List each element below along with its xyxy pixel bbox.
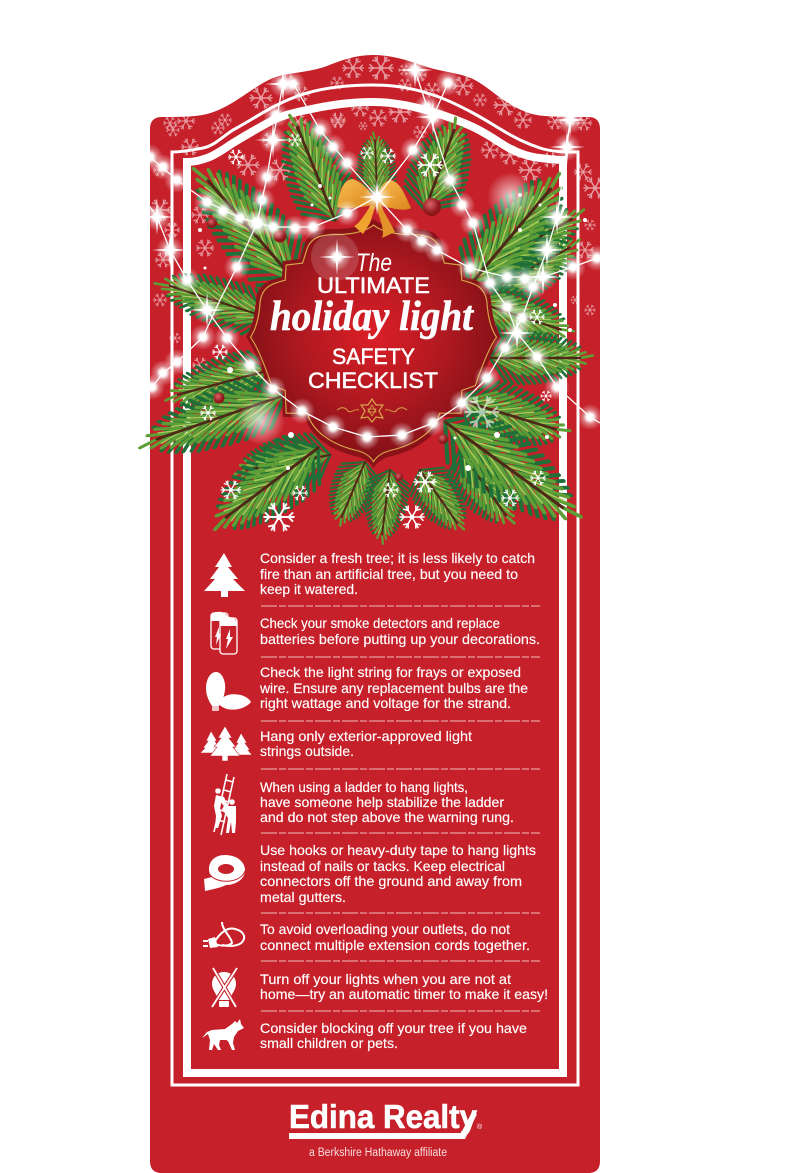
item: turn off lights: home—try an automatic timer to make it easy! xyxy=(260,986,548,1002)
light bulbs xyxy=(137,52,610,450)
item: outlets: To avoid overloading your outlets, do not xyxy=(260,921,510,937)
icon: three pine trees xyxy=(200,726,252,761)
item: ladder: have someone help stabilize the ladder xyxy=(260,794,504,810)
item: hooks and tape: connectors off the ground and away from xyxy=(260,873,522,889)
item: exterior light strings: Hang only exterior-approved light xyxy=(260,728,472,744)
item: block off tree xyxy=(202,1019,527,1051)
icon: extension cord plug xyxy=(203,922,244,948)
checklist dividers xyxy=(261,606,540,1011)
item: fresh tree: Consider a fresh tree; it is less likely to catch xyxy=(260,550,535,566)
item: light string xyxy=(206,664,528,711)
item: smoke detectors: batteries before putting up your decorations. xyxy=(260,631,540,647)
item: hooks and tape: metal gutters. xyxy=(260,889,346,905)
item: smoke detectors xyxy=(211,612,540,654)
item: block off tree: small children or pets. xyxy=(260,1035,398,1051)
item: ladder: and do not step above the warning rung. xyxy=(260,809,514,825)
item: light string: right wattage and voltage for the strand. xyxy=(260,695,511,711)
icon: pine tree xyxy=(204,553,245,597)
icon: dog xyxy=(202,1019,244,1050)
item: exterior light strings xyxy=(200,726,472,761)
title text: ULTIMATE xyxy=(317,273,430,298)
berries xyxy=(207,198,448,481)
item: block off tree: Consider blocking off your tree if you have xyxy=(260,1020,527,1036)
flakes over wreath xyxy=(200,134,552,530)
icon: tape roll xyxy=(204,855,245,891)
title text xyxy=(270,249,474,393)
card background xyxy=(150,55,600,1173)
logo: Edina Realty xyxy=(289,1098,483,1159)
item: fresh tree: fire than an artificial tree, but you need to xyxy=(260,566,518,582)
item: hooks and tape: instead of nails or tacks. Keep electrical xyxy=(260,858,505,874)
pine wreath xyxy=(130,103,599,553)
snowflake pattern xyxy=(149,57,606,372)
title badge xyxy=(246,219,501,468)
item: outlets xyxy=(203,921,530,953)
frame: outer thin line xyxy=(172,85,578,1085)
title text: holiday light xyxy=(270,294,474,340)
item: fresh tree xyxy=(204,550,535,597)
title text: CHECKLIST xyxy=(308,368,438,393)
icon: crossed out bulb xyxy=(212,968,237,1007)
snow specks xyxy=(198,184,587,471)
bow xyxy=(337,179,411,238)
item: light string: Check the light string for frays or exposed xyxy=(260,664,521,680)
item: light string: wire. Ensure any replacement bulbs are the xyxy=(259,680,528,696)
item: hooks and tape xyxy=(204,842,536,905)
frame: inner thick line xyxy=(187,102,563,1073)
logo: Edina Realty: a Berkshire Hathaway affiliate xyxy=(309,1147,447,1159)
item: turn off lights: Turn off your lights when you are not at xyxy=(260,971,511,987)
icon: batteries xyxy=(211,612,237,654)
item: fresh tree: keep it watered. xyxy=(260,581,358,597)
light strings xyxy=(150,70,600,437)
item: ladder: When using a ladder to hang lights, xyxy=(260,779,468,795)
star ornament xyxy=(337,399,407,422)
logo: Edina Realty: ® xyxy=(477,1123,483,1131)
title text: The xyxy=(356,249,392,277)
item: ladder xyxy=(214,774,514,835)
item: hooks and tape: Use hooks or heavy-duty tape to hang lights xyxy=(260,842,536,858)
icon: bulbs xyxy=(206,672,251,711)
item: turn off lights xyxy=(212,968,548,1007)
title text: SAFETY xyxy=(332,344,415,369)
item: smoke detectors: Check your smoke detectors and replace xyxy=(260,615,500,631)
logo: Edina Realty: Edina Realty xyxy=(289,1098,478,1135)
icon: ladder with two people xyxy=(214,774,236,835)
item: outlets: connect multiple extension cords together. xyxy=(260,937,530,953)
item: exterior light strings: strings outside. xyxy=(260,743,354,759)
